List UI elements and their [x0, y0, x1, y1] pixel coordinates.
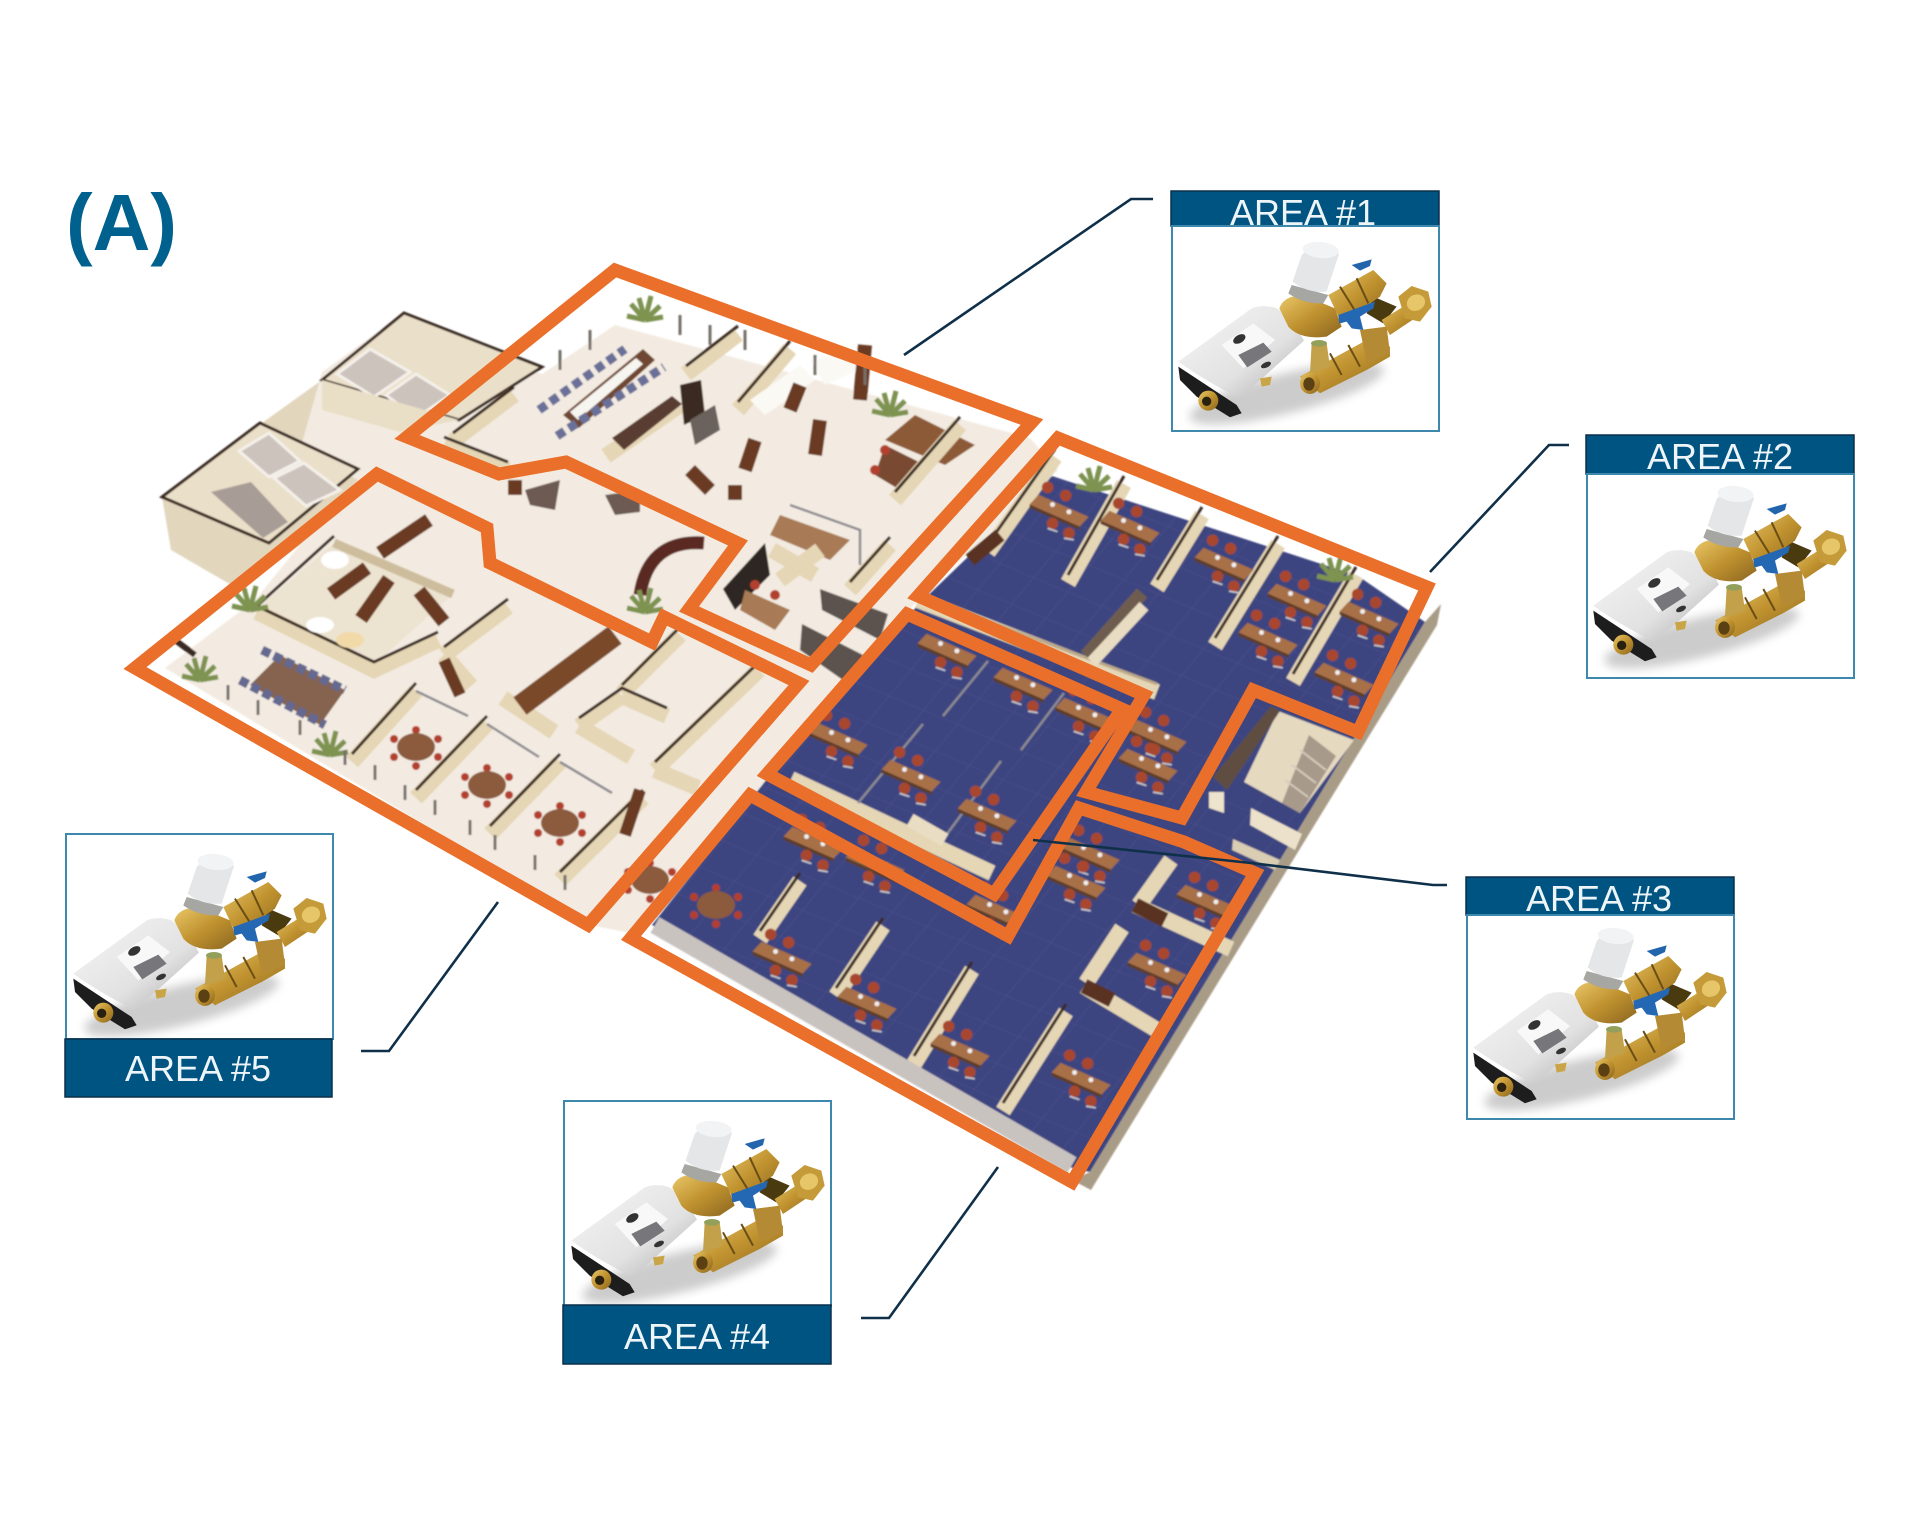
card: area 1 — [1171, 191, 1439, 437]
area 4 partitions and desks — [655, 814, 1236, 1165]
card: area 5 — [65, 834, 333, 1097]
navy carpet floor — [652, 476, 1425, 1172]
card: area 1: AREA #1 — [1230, 192, 1376, 233]
card: area 3: AREA #3 — [1526, 878, 1672, 919]
outline: area 3 — [767, 614, 1122, 894]
leader line: area 1 — [904, 199, 1153, 355]
area 1 rooms — [444, 296, 975, 685]
area 2 and 3 partitions — [791, 449, 1399, 873]
outline: area 4 — [631, 795, 1255, 1182]
left service block front wall — [162, 380, 358, 590]
outline: area 1 — [407, 270, 1032, 665]
leader line: area 5 — [361, 902, 498, 1051]
leader line: area 2 — [1430, 445, 1569, 572]
card: area 4 — [563, 1101, 831, 1364]
right building edge — [1072, 604, 1441, 1190]
card: area 5: AREA #5 — [125, 1048, 271, 1089]
stair room — [1209, 706, 1354, 870]
leader line: area 4 — [861, 1167, 998, 1318]
outline: area 5 — [135, 474, 799, 925]
card: area 2: AREA #2 — [1647, 436, 1793, 477]
card: area 4: AREA #4 — [624, 1316, 770, 1357]
area 5 rooms — [175, 520, 759, 903]
service block with lift shafts — [162, 313, 542, 543]
card: area 3 — [1466, 877, 1734, 1123]
heading: (A): (A) — [66, 178, 177, 267]
floor plan illustration — [162, 296, 1441, 1190]
cream floor — [165, 313, 1058, 935]
leader line: area 3 — [1033, 840, 1447, 885]
card: area 2 — [1586, 435, 1854, 681]
outline: area 2 — [918, 438, 1427, 818]
